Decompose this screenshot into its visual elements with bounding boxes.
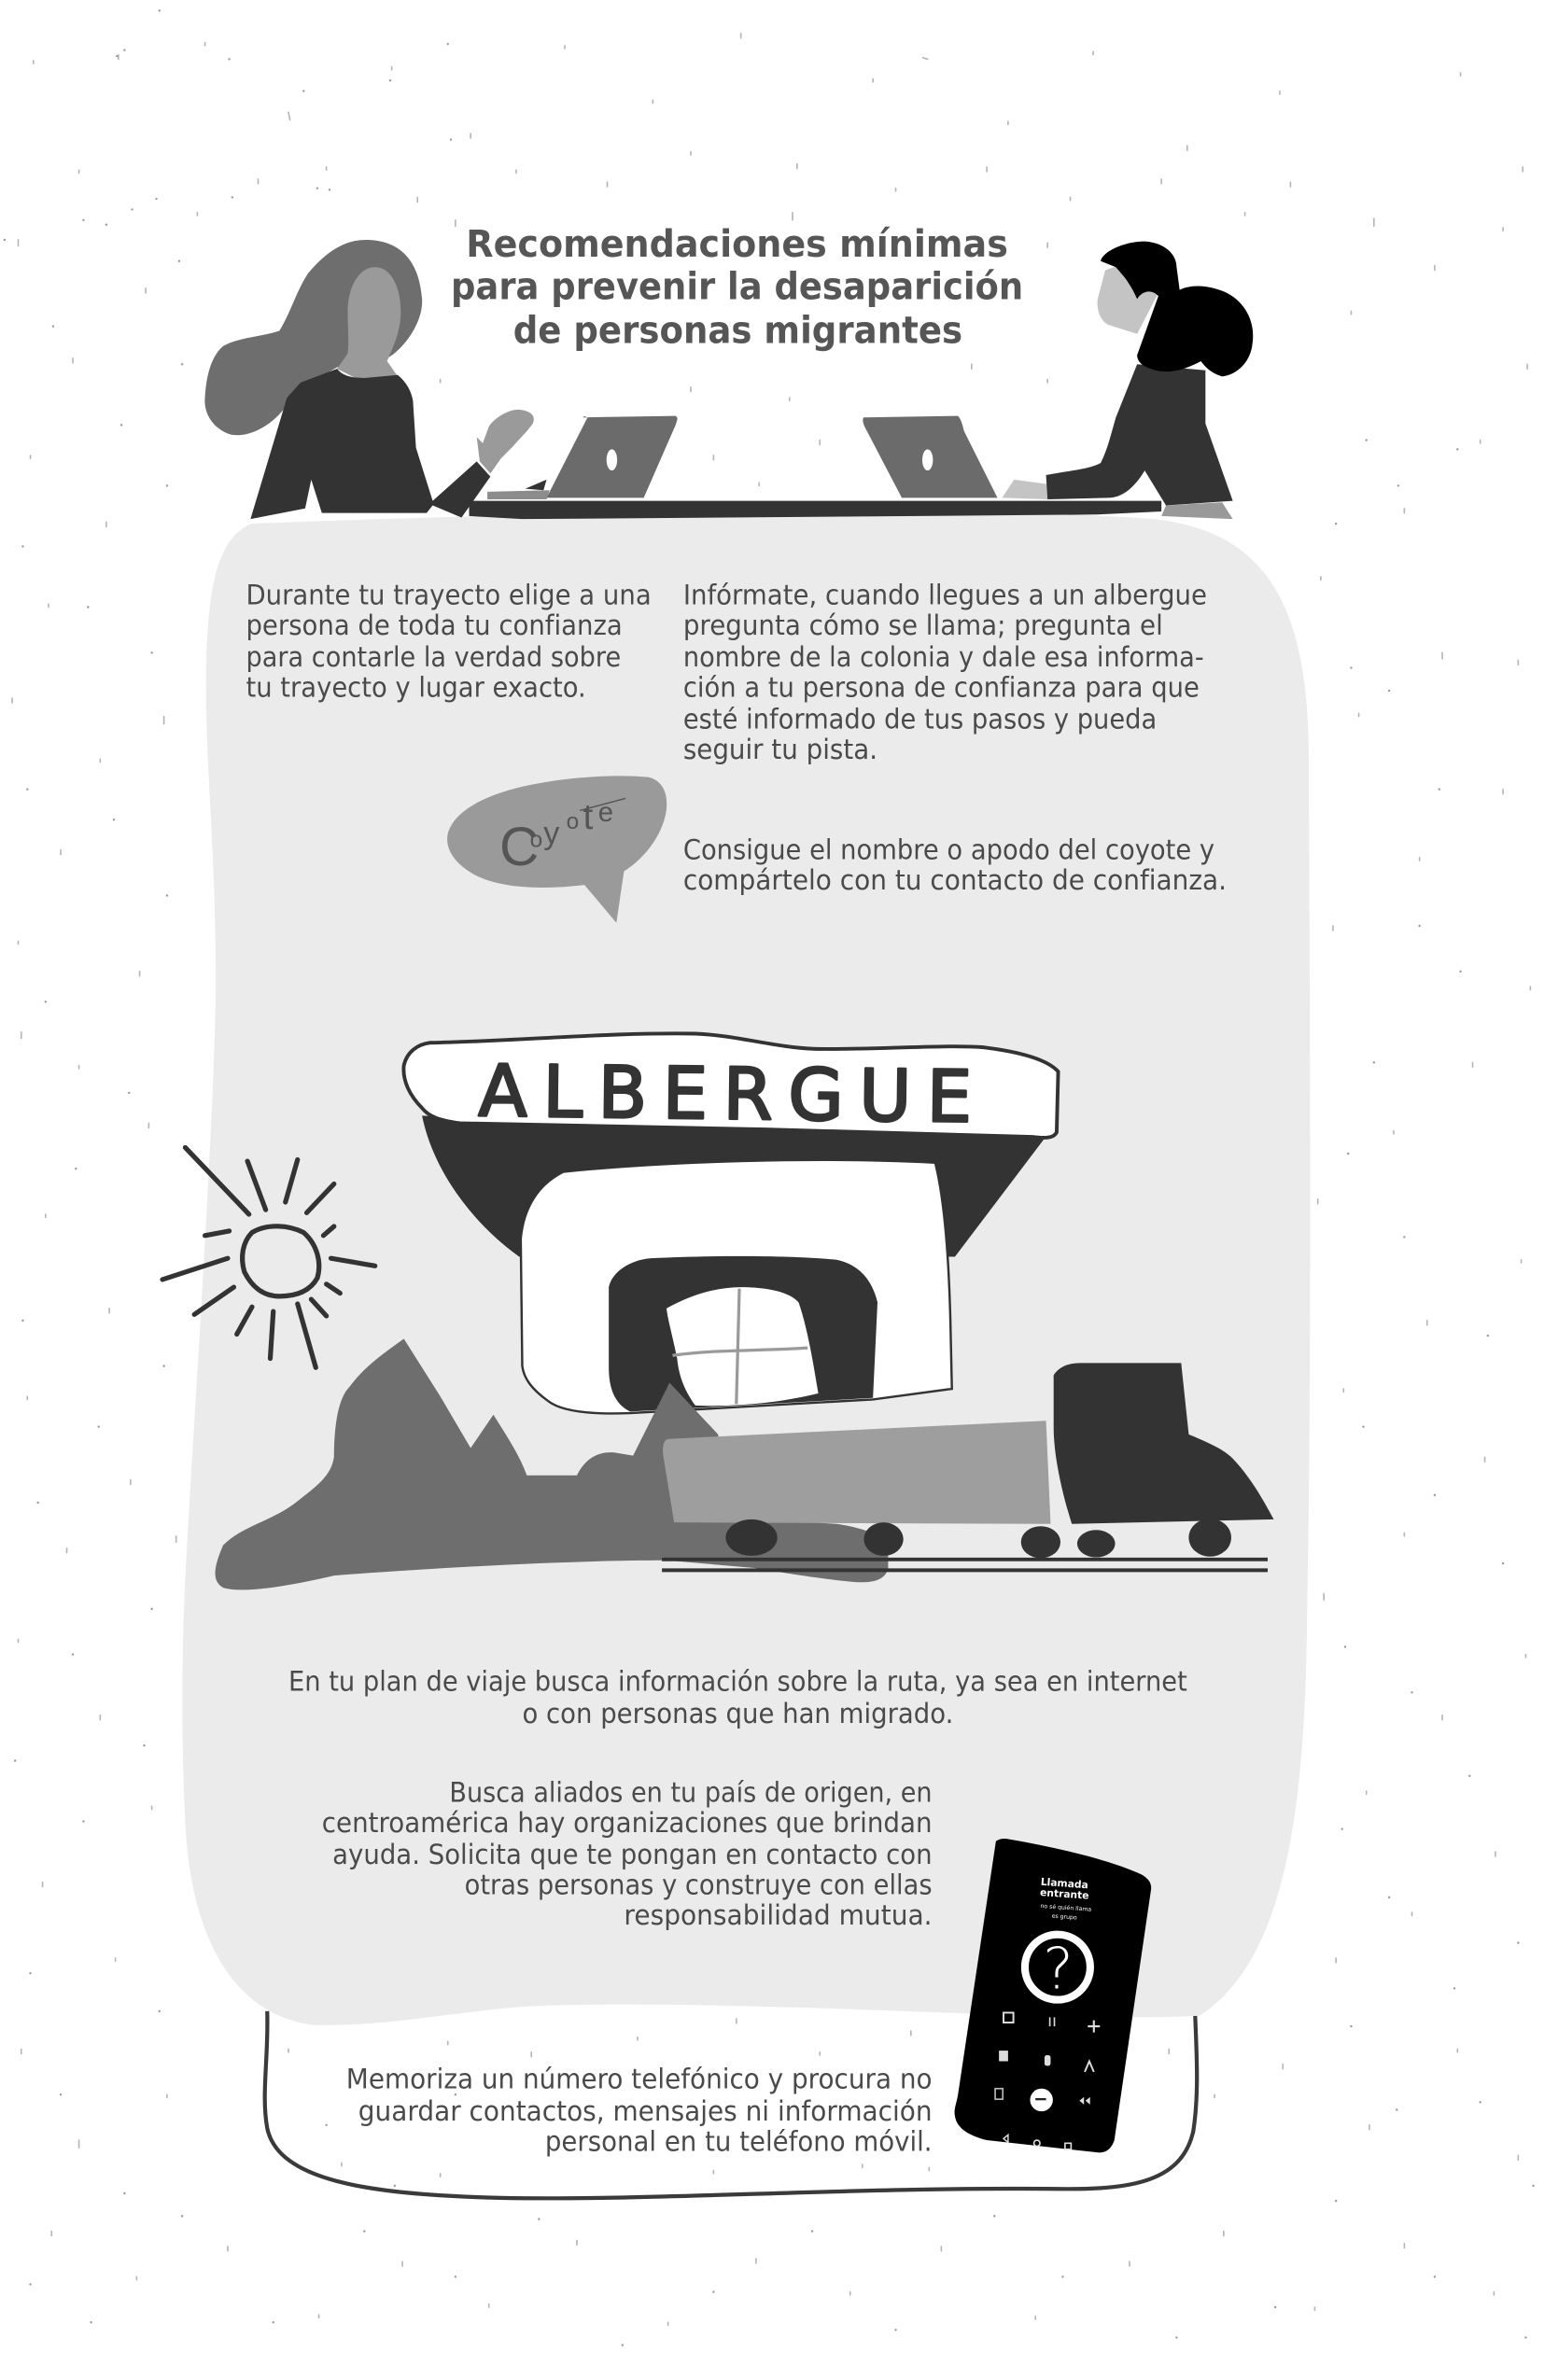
title: [451, 223, 1023, 353]
text: infórmate en el albergue: nombre de la colonia y dale esa informa-: [683, 641, 1204, 673]
illustration: right laptop: [863, 416, 998, 497]
text: infórmate en el albergue: seguir tu pista.: [683, 734, 877, 765]
hand: [1002, 480, 1047, 499]
text: plan de viaje: En tu plan de viaje busca información sobre la ruta, ya sea en internet: [288, 1666, 1187, 1698]
illustration: table: [470, 501, 1161, 519]
hair: [1101, 242, 1253, 376]
icon: mobile phone with incoming call: es grupo: [1051, 1913, 1077, 1922]
icon: mobile phone with incoming call: Llamada: [1040, 1876, 1088, 1891]
text: nombre del coyote: [683, 833, 1227, 896]
icon: coyote speech bubble: t: [583, 797, 594, 837]
face: [1098, 261, 1158, 334]
trailer: [663, 1421, 1050, 1524]
illustration: left laptop: [487, 416, 678, 499]
illustration: shelter sign: [403, 1033, 1059, 1140]
torso and arm: [1046, 364, 1233, 506]
text: busca aliados: Busca aliados en tu país de origen, en: [449, 1776, 933, 1808]
text: nombre del coyote: Consigue el nombre o apodo del coyote y: [683, 833, 1214, 865]
text: infórmate en el albergue: pregunta cómo se llama; pregunta el: [683, 609, 1163, 641]
torso and arm: [250, 369, 490, 519]
gray main panel: [182, 511, 1311, 2025]
illustration: mountains: [216, 1338, 888, 1589]
text: elige una persona de confianza: para contarle la verdad sobre: [246, 641, 621, 673]
face and neck: [337, 267, 400, 380]
text: memoriza un número: [346, 2064, 933, 2157]
text: infórmate en el albergue: ción a tu persona de confianza para que: [683, 671, 1200, 703]
facade: [521, 1160, 952, 1413]
text: memoriza un número: guardar contactos, mensajes ni información: [358, 2095, 933, 2127]
icon: coyote speech bubble: o: [530, 827, 542, 852]
hair: [204, 240, 422, 435]
text: elige una persona de confianza: persona de toda tu confianza: [246, 609, 623, 641]
text: elige una persona de confianza: Durante tu trayecto elige a una: [246, 579, 652, 610]
wheels: [725, 1519, 778, 1556]
icon: coyote speech bubble: o: [567, 809, 579, 834]
icon: coyote speech bubble: C: [499, 817, 539, 877]
text: infórmate en el albergue: [683, 579, 1207, 765]
bottom outlined box: [265, 2007, 1197, 2198]
text: memoriza un número: personal en tu teléfono móvil.: [545, 2125, 933, 2157]
text: nombre del coyote: compártelo con tu contacto de confianza.: [683, 864, 1227, 896]
text: elige una persona de confianza: tu trayecto y lugar exacto.: [246, 671, 586, 703]
icon: coyote speech bubble: y: [543, 816, 559, 851]
text: plan de viaje: o con personas que han migrado.: [522, 1698, 953, 1729]
roof: [422, 1115, 1045, 1257]
text: memoriza un número: Memoriza un número telefónico y procura no: [346, 2064, 933, 2095]
doorway: [609, 1256, 877, 1411]
text: infórmate en el albergue: Infórmate, cuando llegues a un albergue: [683, 579, 1207, 610]
title: para prevenir la desaparición: [451, 265, 1023, 308]
text: plan de viaje: [288, 1666, 1187, 1729]
text: busca aliados: responsabilidad mutua.: [624, 1899, 933, 1931]
text: busca aliados: centroamérica hay organizaciones que brindan: [322, 1807, 933, 1839]
title: de personas migrantes: [513, 310, 962, 353]
icon: mobile phone with incoming call: ?: [1043, 1935, 1074, 2002]
illustration: woman on the left: [204, 240, 534, 519]
text: infórmate en el albergue: esté informado de tus pasos y pueda: [683, 704, 1157, 735]
icon: mobile phone with incoming call: entrante: [1040, 1886, 1089, 1902]
icon: mobile phone with incoming call: [955, 1839, 1151, 2152]
raised hand: [477, 410, 534, 473]
feet: [1161, 502, 1233, 519]
illustration: sun: [162, 1147, 375, 1367]
text: busca aliados: ayuda. Solicita que te pongan en contacto con: [332, 1839, 933, 1870]
illustration: shelter building: [422, 1115, 1045, 1413]
text: busca aliados: [322, 1776, 933, 1931]
icon: coyote speech bubble: e: [598, 798, 613, 828]
cab: [1054, 1363, 1274, 1524]
text: busca aliados: otras personas y construye con ellas: [465, 1869, 933, 1901]
text: elige una persona de confianza: [246, 579, 652, 703]
icon: coyote speech bubble: [447, 776, 667, 923]
illustration: woman on the right: [1002, 242, 1253, 519]
window: [667, 1287, 819, 1406]
illustration: truck: [662, 1363, 1274, 1570]
icon: mobile phone with incoming call: no sé quién llama: [1040, 1902, 1092, 1913]
rails: [662, 1560, 1268, 1570]
illustration: shelter sign: ALBERGUE: [478, 1050, 973, 1140]
title: Recomendaciones mínimas: [466, 223, 1008, 266]
